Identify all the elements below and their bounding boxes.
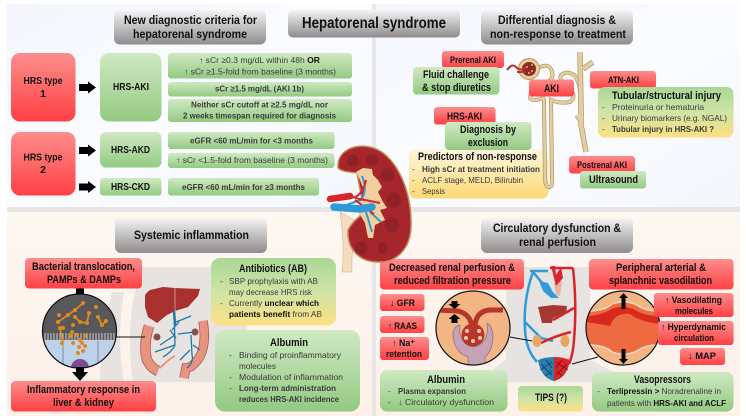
criterion: no cutoff: Neither sCr cutoff at ≥2.5 mg/dL nor	[191, 100, 329, 110]
label: RAAS: ↑ RAAS	[388, 321, 417, 331]
label: hyperdynamic circulation: circulation	[674, 333, 714, 343]
label: sodium retention: retention	[386, 349, 422, 359]
criterion: AKI 1b	[168, 82, 352, 96]
box: HRS type 1	[11, 53, 76, 122]
box: albumin	[215, 330, 360, 412]
box: HRS-AKI	[100, 53, 162, 122]
box: albumin: molecules	[239, 361, 276, 371]
label: postrenal AKI	[569, 156, 635, 174]
illustration: liver and intestine	[145, 287, 204, 378]
box: inflammatory response: liver & kidney	[53, 397, 114, 409]
label: GFR: ↓ GFR	[390, 298, 416, 308]
box: fluid challenge: & stop diuretics	[422, 82, 491, 94]
heading: new diagnostic criteria: hepatorenal syndrome	[133, 27, 247, 41]
box: albumin: reduces HRS-AKI incidence	[239, 394, 339, 404]
box: vasopressors	[592, 372, 734, 412]
label: ATN-AKI	[590, 71, 656, 88]
heading: circulatory dysfunction: renal perfusion	[519, 235, 596, 249]
label: HRS-AKI	[434, 107, 496, 124]
box: decreased renal perfusion: Decreased renal perfusion &	[389, 262, 515, 274]
box: albumin: Modulation of inflammation	[239, 372, 343, 382]
box: antibiotics: -	[220, 298, 223, 308]
box: peripheral vasodilation: splanchnic vasodilation	[609, 275, 712, 287]
box: peripheral vasodilation: Peripheral arterial &	[616, 262, 706, 274]
box: vasopressors: Vasopressors	[634, 374, 691, 386]
box: ultrasound: Ultrasound	[589, 174, 638, 186]
criterion: sCr below 1.5-fold: ↑ sCr <1.5-fold from baseline (3 months)	[176, 155, 328, 165]
illustration: central kidney	[330, 146, 411, 272]
label: RAAS	[380, 316, 424, 333]
criterion: eGFR under 3 months: eGFR <60 mL/min for <3 months	[190, 136, 313, 146]
icon: pressure arrow down	[448, 301, 460, 309]
label: postrenal AKI: Postrenal AKI	[577, 160, 627, 170]
illustration: circulation diagram	[525, 266, 575, 381]
label: vasodilating molecules	[654, 293, 734, 317]
body silhouette	[475, 267, 633, 382]
label: sodium retention: ↑ Na⁺	[392, 338, 415, 348]
criterion: sCr below 1.5-fold	[168, 153, 334, 168]
callout lines: circulation to magnifiers	[510, 337, 598, 364]
box: tubular injury: Urinary biomarkers (e.g. NGAL)	[612, 113, 727, 123]
box: albumin	[380, 370, 508, 412]
box: bacterial translocation: Bacterial translocation,	[32, 261, 135, 273]
label: prerenal AKI	[442, 51, 504, 68]
box: HRS-AKD: HRS-AKD	[111, 144, 150, 156]
heading: systemic inflammation: Systemic inflammation	[134, 228, 249, 242]
box: tubular injury	[598, 87, 734, 138]
box: HRS type 2: 2	[40, 164, 46, 176]
box: predictors of non-response: -	[412, 164, 415, 174]
box: predictors of non-response: -	[412, 186, 415, 196]
box: antibiotics: may decrease HRS risk	[229, 287, 313, 297]
box: albumin: ↓ Circulatory dysfunction	[398, 397, 494, 407]
box: HRS-CKD	[100, 178, 162, 196]
criterion: sCr rise	[168, 53, 352, 78]
box: tubular injury: -	[602, 113, 605, 123]
box: tubular injury: -	[602, 124, 605, 134]
box: ultrasound	[580, 171, 646, 188]
box: albumin: Long-term administration	[239, 383, 336, 393]
body silhouette: left limb	[100, 292, 124, 382]
panel: circulatory dysfunction	[376, 212, 740, 416]
box: tubular injury: Tubular injury in HRS-AKI ?	[612, 124, 714, 134]
label: AKI: AKI	[544, 83, 559, 95]
box: vasopressors: Terlipressin > Noradrenaline in	[607, 386, 721, 396]
arrow: type 2 to HRS-AKD	[79, 144, 96, 156]
label: hyperdynamic circulation: ↑ Hyperdynamic	[661, 322, 726, 332]
criterion: no cutoff: 2 weeks timespan required for diagnosis	[183, 110, 336, 120]
box: inflammatory response	[11, 381, 156, 412]
box: albumin: -	[388, 386, 391, 396]
heading: circulatory dysfunction: Circulatory dysfunction &	[493, 221, 621, 235]
arrow: magnifier to inflammatory response	[72, 367, 88, 381]
box: antibiotics: Currently unclear which	[229, 298, 319, 308]
illustration: gut barrier magnifier	[42, 294, 118, 368]
body silhouette	[130, 267, 247, 382]
box: albumin: -	[229, 350, 232, 360]
box: predictors of non-response: -	[412, 175, 415, 185]
box: predictors of non-response: Predictors of non-response	[418, 151, 537, 163]
criterion: sCr rise: ↑ sCr ≥1.5-fold from baseline (3 months)	[184, 66, 336, 76]
arrow: type 1 to HRS-AKI	[79, 82, 96, 94]
box: albumin: Plasma expansion	[398, 386, 466, 396]
icon: pressure arrow up	[448, 314, 460, 323]
box: TIPS	[518, 386, 583, 412]
box: TIPS: TIPS (?)	[535, 392, 567, 404]
box: predictors of non-response: High sCr at treatment initiation	[422, 164, 540, 174]
box: HRS type 1: HRS type	[24, 75, 63, 87]
criterion: no cutoff	[168, 99, 352, 122]
box: tubular injury: -	[602, 102, 605, 112]
box: diagnosis by exclusion: exclusion	[468, 137, 508, 149]
illustration: dilated vessel magnifier	[586, 291, 660, 365]
heading: differential diagnosis: non-response to treatment	[490, 27, 626, 41]
label: AKI	[529, 80, 574, 96]
callout line: intestine magnifier	[116, 336, 145, 338]
heading: differential diagnosis	[481, 10, 633, 44]
box: predictors of non-response: Sepsis	[422, 186, 445, 196]
label: MAP: ↓ MAP	[688, 351, 716, 361]
box: vasopressors: patients with HRS-AKI and ACLF	[607, 398, 726, 408]
arrow: translocation to magnifier	[76, 288, 84, 295]
box: antibiotics: -	[220, 276, 223, 286]
criterion: eGFR over 3 months: eGFR <60 mL/min for ≥3 months	[182, 182, 305, 192]
box: albumin: -	[229, 383, 232, 393]
box: diagnosis by exclusion	[445, 122, 532, 150]
box: albumin: -	[229, 372, 232, 382]
box: antibiotics: patients benefit from AB	[229, 309, 322, 319]
box: fluid challenge: Fluid challenge	[423, 69, 489, 81]
box: HRS-AKD	[100, 132, 162, 168]
label: prerenal AKI: Prerenal AKI	[450, 55, 496, 65]
illustration: nephron	[507, 52, 593, 187]
box: tubular injury: Proteinuria or hematuria	[612, 102, 704, 112]
criterion: eGFR under 3 months	[168, 132, 334, 149]
box: predictors of non-response	[409, 149, 548, 198]
title	[288, 10, 460, 38]
heading: circulatory dysfunction	[481, 218, 633, 253]
box: decreased renal perfusion: reduced filtration pressure	[394, 275, 511, 287]
box: inflammatory response: Inflammatory response in	[27, 384, 140, 396]
title: Hepatorenal syndrome	[302, 15, 446, 32]
box: HRS type 1: 1	[40, 88, 46, 100]
box: HRS type 2: HRS type	[24, 152, 63, 164]
box: albumin: Binding of proinflammatory	[239, 350, 342, 360]
label: ATN-AKI: ATN-AKI	[608, 75, 639, 85]
box: antibiotics	[211, 258, 336, 326]
icon: dilation arrow up	[619, 293, 628, 309]
arrow: type 2 to HRS-CKD	[79, 181, 96, 193]
label: GFR	[380, 294, 424, 311]
box: antibiotics: Antibiotics (AB)	[239, 263, 307, 275]
label: vasodilating molecules: ↑ Vasodilating	[665, 295, 722, 305]
criterion: eGFR over 3 months	[168, 178, 319, 196]
label: HRS-AKI: HRS-AKI	[447, 112, 482, 122]
box: antibiotics: SBP prophylaxis with AB	[229, 276, 318, 286]
panel: new diagnostic criteria	[7, 4, 372, 207]
box: HRS type 2	[11, 132, 76, 196]
icon: dilation arrow down	[619, 349, 628, 364]
box: peripheral vasodilation	[589, 259, 734, 290]
box: albumin: Albumin	[270, 337, 308, 349]
panel: differential diagnosis	[376, 4, 740, 207]
label: vasodilating molecules: molecules	[675, 306, 713, 316]
heading: new diagnostic criteria: New diagnostic criteria for	[124, 13, 257, 27]
criterion: sCr rise: ↑ sCr ≥0.3 mg/dL within 48h OR	[199, 55, 320, 65]
heading: new diagnostic criteria	[114, 10, 266, 44]
label: MAP	[680, 348, 725, 365]
label: sodium retention	[380, 337, 429, 360]
box: predictors of non-response: ACLF stage, MELD, Bilirubin	[422, 175, 523, 185]
box: vasopressors: -	[597, 386, 600, 396]
box: HRS-AKI: HRS-AKI	[113, 81, 149, 93]
box: HRS-CKD: HRS-CKD	[111, 181, 150, 193]
box: albumin: -	[388, 397, 391, 407]
criterion: AKI 1b: sCr ≥1.5 mg/dL (AKI 1b)	[215, 84, 304, 94]
box: decreased renal perfusion	[380, 259, 524, 290]
label: hyperdynamic circulation	[658, 321, 734, 345]
box: diagnosis by exclusion: Diagnosis by	[460, 124, 516, 136]
panel: systemic inflammation	[7, 212, 372, 416]
heading: systemic inflammation	[115, 218, 267, 253]
box: bacterial translocation	[25, 258, 142, 288]
heading: differential diagnosis: Differential diagnosis &	[498, 13, 616, 27]
illustration: glomerulus magnifier	[436, 291, 510, 372]
box: fluid challenge	[413, 67, 500, 94]
box: tubular injury: Tubular/structural injury	[612, 90, 721, 102]
box: bacterial translocation: PAMPs & DAMPs	[47, 274, 121, 286]
box: albumin: Albumin	[427, 374, 465, 386]
